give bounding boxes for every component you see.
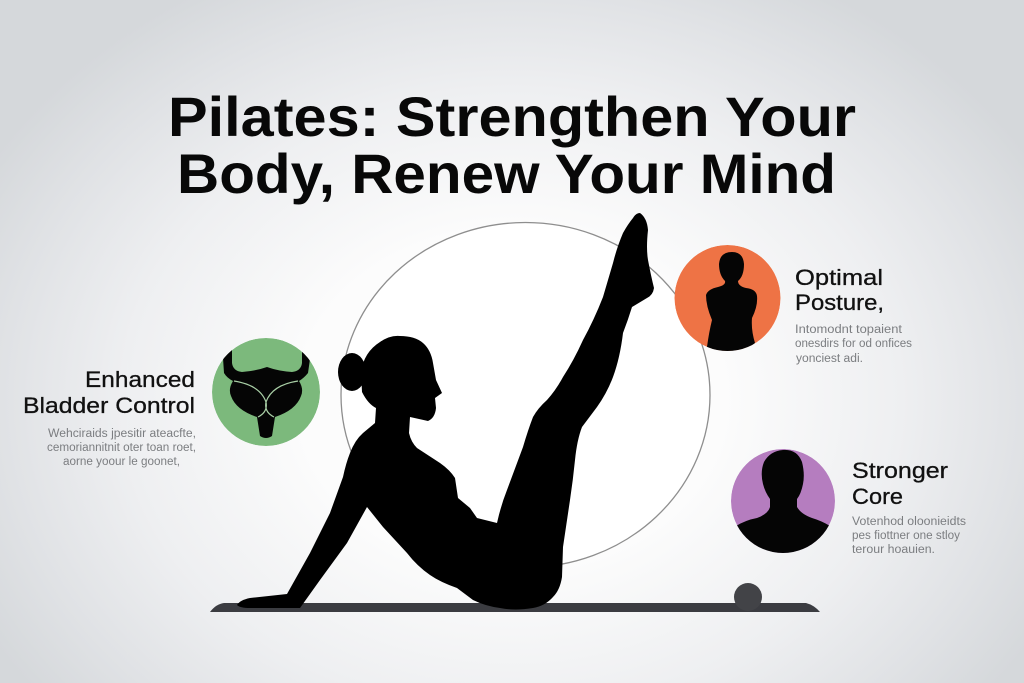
description: Intomodnt topaient	[795, 324, 903, 336]
pilates figure silhouette	[237, 213, 654, 610]
heading: Core	[852, 484, 903, 509]
outlined circle behind figure	[341, 222, 710, 568]
heading	[23, 367, 195, 418]
description: Votenhod oloonieidts	[852, 516, 966, 528]
small exercise ball	[734, 583, 762, 611]
description: yonciest adi.	[796, 353, 863, 365]
benefit: optimal posture	[674, 245, 912, 365]
benefit: stronger core	[731, 449, 966, 560]
title: Pilates: Strengthen Your	[168, 85, 856, 148]
description: aorne yoour le goonet,	[63, 456, 180, 468]
heading: Enhanced	[85, 367, 195, 392]
title	[168, 85, 856, 205]
benefit: enhanced bladder control	[23, 338, 320, 468]
description: cemoriannitnit oter toan roet,	[47, 442, 196, 454]
description: Wehciraids jpesitir ateacfte,	[48, 428, 196, 440]
description	[47, 428, 196, 468]
heading: Optimal	[795, 265, 883, 290]
heading	[852, 458, 948, 509]
title: Body, Renew Your Mind	[177, 142, 836, 205]
icon: torso on orange circle	[674, 245, 780, 352]
description: onesdirs for od onfices	[795, 338, 912, 350]
description: terour hoauien.	[852, 544, 935, 556]
icon: bladder on green circle	[212, 338, 320, 446]
heading: Stronger	[852, 458, 948, 483]
description	[852, 516, 966, 556]
description	[795, 324, 912, 365]
heading: Posture,	[795, 290, 884, 315]
description: pes fiottner one stloy	[852, 530, 960, 542]
heading	[795, 265, 884, 315]
exercise mat	[210, 603, 820, 612]
heading: Bladder Control	[23, 393, 195, 418]
icon: head and shoulders on purple circle	[731, 449, 835, 560]
